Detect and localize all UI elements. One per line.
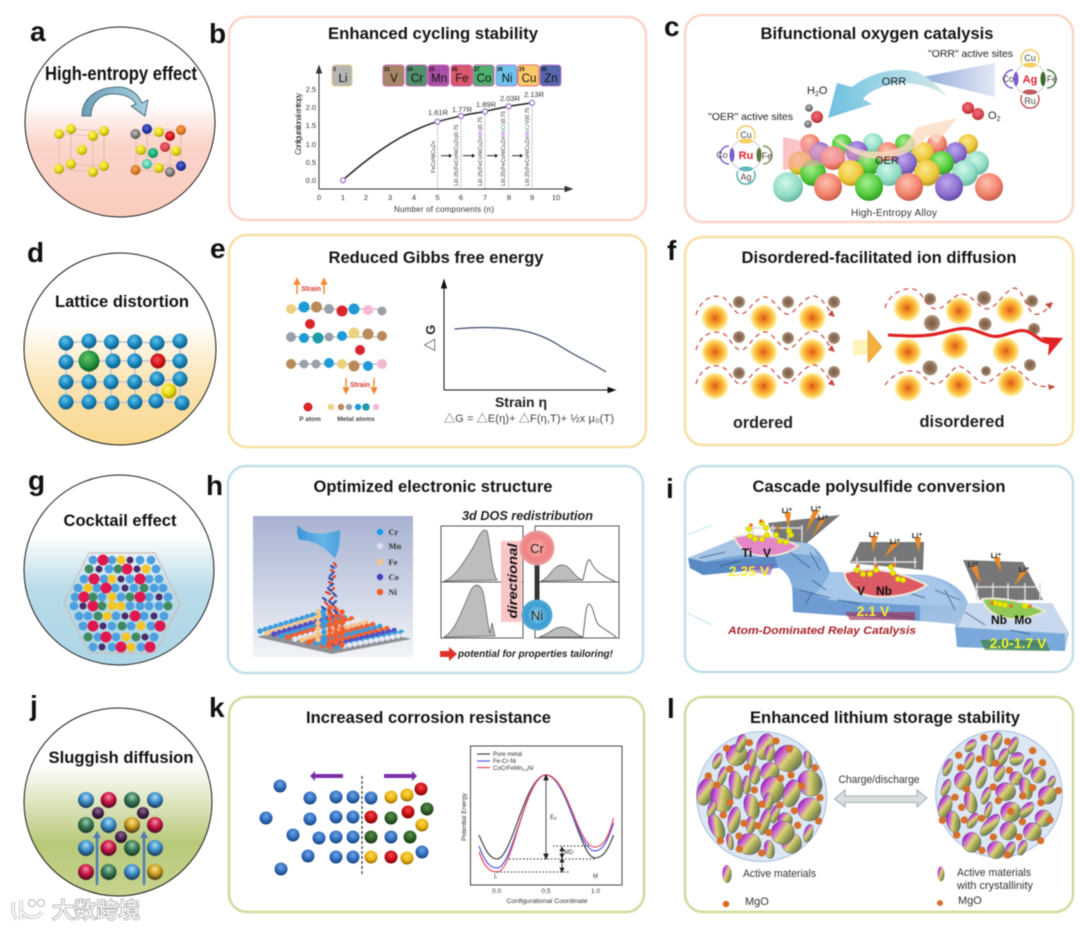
atom pair labels: V — [857, 584, 865, 598]
label a: a — [30, 16, 46, 47]
line chart: configurational entropy: Number of components (n) — [394, 205, 494, 214]
potential energy chart: Configurational Coordinate — [506, 898, 588, 905]
DOS redistribution diagram: 3d DOS redistribution — [462, 508, 593, 523]
heading: Increased corrosion resistance — [306, 708, 551, 727]
label j: j — [29, 690, 38, 721]
atom deposition illustration: Ni — [388, 587, 398, 597]
periodic-table element tiles: 23 — [384, 67, 390, 73]
potential energy chart — [461, 746, 622, 905]
strain label top: Strain — [301, 286, 321, 293]
line chart: configurational entropy: Li0.25(FeCoNiCuZnMn)0.75 — [478, 117, 484, 186]
periodic-table element tiles: Cr — [411, 73, 423, 85]
label l: l — [667, 693, 675, 724]
Li plus ions: Li⁺ — [968, 560, 978, 569]
legend right — [937, 866, 1033, 907]
legend right: Active materials — [957, 867, 1031, 879]
atom deposition illustration: Co — [388, 572, 399, 582]
water molecule — [804, 104, 823, 128]
periodic-table element tiles: Cu — [522, 73, 536, 85]
potential energy chart: 0.0 — [492, 888, 501, 895]
Li plus ions: Li⁺ — [1019, 565, 1029, 574]
sphere alloy surface — [773, 133, 1003, 202]
panel g: cocktail effect — [24, 465, 214, 665]
panel f: disordered-facilitated ion diffusion — [667, 235, 1073, 445]
relay catalysis caption: Atom-Dominated Relay Catalysis — [727, 625, 916, 637]
atom deposition illustration: Fe — [388, 557, 398, 567]
line chart: configurational entropy: 1.5 — [306, 121, 316, 130]
voltage labels — [729, 563, 1047, 651]
atom deposition illustration: Mn — [388, 541, 402, 551]
line chart: configurational entropy: 1.61R — [428, 108, 449, 117]
O2 label: O — [988, 110, 997, 122]
potential energy chart: L — [494, 874, 498, 880]
DOS redistribution diagram: potential for properties tailoring! — [457, 649, 614, 660]
periodic-table element tiles: Li — [339, 73, 347, 85]
ordered label: ordered — [733, 414, 793, 432]
O2 label: 2 — [997, 116, 1001, 123]
ORR site cluster: Co — [1002, 74, 1014, 84]
periodic-table element tiles: 26 — [452, 67, 458, 73]
periodic-table element tiles: Mn — [431, 73, 447, 85]
Gibbs free energy chart: Strain η — [495, 394, 547, 410]
ordered crystal cell — [54, 124, 109, 177]
Li plus ions: Li⁺ — [811, 504, 821, 513]
label b: b — [209, 18, 226, 49]
catalyst boats — [734, 519, 1045, 619]
ORR curved arrow — [828, 70, 947, 118]
panel k: increased corrosion resistance — [209, 692, 644, 912]
heading: Reduced Gibbs free energy — [328, 248, 544, 267]
line chart: configurational entropy: 0.5 — [306, 158, 316, 167]
disordered crystal cell — [130, 124, 186, 177]
diffusion atoms — [78, 792, 163, 880]
periodic-table element tiles: Zn — [544, 73, 558, 85]
legend atoms: P atom — [299, 416, 321, 423]
watermark — [13, 898, 140, 923]
label e: e — [210, 233, 226, 264]
OER site cluster — [716, 126, 772, 184]
legend atoms — [299, 402, 379, 423]
atom pair labels: V — [763, 546, 771, 560]
potential energy chart: Pure metal — [493, 752, 522, 758]
heading: Bifunctional oxygen catalysis — [760, 24, 994, 43]
ORR site cluster: Fe — [1047, 74, 1057, 84]
grey membranes and fences — [744, 515, 1043, 600]
watermark: 大数跨境 — [52, 898, 140, 923]
strain arrows top — [294, 279, 326, 294]
heading: Cocktail effect — [64, 511, 177, 530]
periodic-table element tiles: 27 — [474, 67, 480, 73]
label k: k — [209, 692, 225, 723]
periodic-table element tiles: 25 — [429, 67, 435, 73]
line chart: configurational entropy: 10 — [552, 193, 560, 202]
Li plus ions: Li⁺ — [782, 506, 792, 515]
heading: Lattice distortion — [55, 292, 189, 311]
periodic-table element tiles: Fe — [455, 73, 469, 85]
H2O label: O — [819, 85, 828, 97]
heading: Sluggish diffusion — [48, 748, 194, 767]
potential energy chart: M — [593, 874, 598, 880]
periodic-table element tiles: Ni — [502, 73, 512, 85]
ORR site cluster: Ru — [1024, 96, 1036, 106]
line chart: configurational entropy: 2 — [364, 193, 368, 202]
legend right: MgO — [958, 895, 982, 907]
periodic-table element tiles: Co — [477, 73, 491, 85]
line chart: configurational entropy: 1.89R — [476, 100, 497, 109]
upward blue arrows — [93, 831, 148, 885]
panel l: enhanced lithium storage stability — [667, 693, 1073, 912]
ORR label: ORR — [882, 76, 906, 88]
atom pair labels — [742, 546, 1032, 627]
line chart: configurational entropy: 5 — [435, 193, 440, 202]
legend left — [722, 865, 816, 908]
atom pair labels: Ti — [742, 546, 752, 560]
line chart: configurational entropy: Configurational entropy — [294, 93, 303, 155]
line chart: configurational entropy — [294, 66, 572, 214]
Li plus ions: Li⁺ — [991, 551, 1001, 560]
line chart: configurational entropy: Li0.25(FeCoNiCuZnMnCrV)0.75 — [525, 107, 531, 186]
legend atoms: Metal atoms — [337, 416, 375, 423]
purple arrows — [310, 771, 417, 781]
panel e: reduced Gibbs free energy — [210, 233, 646, 447]
distorted lattice — [58, 334, 190, 410]
label g: g — [28, 465, 45, 496]
voltage labels: 2.0-1.7 V — [990, 635, 1047, 651]
strain arrows bottom — [344, 378, 376, 393]
ordered lattice — [696, 296, 840, 400]
line chart: configurational entropy: 1.77R — [452, 105, 473, 114]
heading: Enhanced lithium storage stability — [750, 708, 1021, 727]
periodic-table element tiles: 29 — [519, 67, 525, 73]
label h: h — [206, 470, 223, 501]
Li plus ions: Li⁺ — [818, 513, 828, 522]
periodic-table element tiles: V — [390, 73, 398, 85]
potential energy chart: 0.5 — [522, 767, 529, 772]
panel a: high-entropy effect — [25, 16, 215, 217]
strain label bottom: Strain — [350, 382, 370, 389]
potential energy chart: 0.5 — [541, 888, 551, 895]
DOS redistribution diagram — [440, 508, 619, 661]
ORR site cluster: Ag — [1023, 74, 1037, 86]
label c: c — [664, 11, 680, 42]
ion diffusion path arrow — [888, 328, 1063, 356]
OER site cluster: Co — [716, 150, 728, 160]
label d: d — [27, 237, 44, 268]
potential energy chart: Ni — [528, 766, 534, 772]
oxygen molecule — [962, 102, 984, 120]
potential energy chart: Fe-Cr-Ni — [493, 759, 516, 765]
periodic-table element tiles: 30 — [541, 67, 547, 73]
potential energy chart: Eₐ — [550, 815, 557, 821]
line chart: configurational entropy: Li0.25(FeCoNiCuZnMnCr)0.75 — [501, 111, 507, 186]
potential energy chart: CoCrFeMn — [493, 766, 522, 772]
periodic-table element tiles: 24 — [407, 67, 413, 73]
charge/discharge label: Charge/discharge — [838, 774, 920, 786]
legend left: MgO — [745, 896, 769, 908]
OER site cluster: Fe — [762, 151, 772, 161]
periodic-table element tiles — [332, 65, 561, 86]
heading: Optimized electronic structure — [314, 477, 552, 496]
disordered label: disordered — [920, 413, 1004, 431]
line chart: configurational entropy: 0 — [317, 193, 321, 202]
line chart: configurational entropy: 1.0 — [306, 140, 316, 149]
Li plus ions: Li⁺ — [890, 537, 900, 546]
line chart: configurational entropy: 2.13R — [524, 90, 545, 99]
hexagon dot alloy — [64, 553, 180, 653]
heading: Enhanced cycling stability — [328, 24, 539, 43]
legend right: with crystallinity — [956, 880, 1033, 892]
H2O label: 2 — [815, 91, 819, 98]
H2O label: H — [807, 85, 815, 97]
double arrow — [834, 790, 927, 807]
label i: i — [666, 473, 674, 504]
panel i: cascade polysulfide conversion — [666, 466, 1073, 672]
Gibbs free energy chart: △ G — [423, 325, 438, 351]
DOS redistribution diagram: Cr — [530, 541, 545, 556]
legend left: Active materials — [743, 868, 816, 880]
atom pair labels: Nb — [876, 584, 892, 598]
potential energy chart: Potential Energy — [461, 792, 468, 841]
ORR site cluster: Cu — [1024, 53, 1036, 63]
icon: curved arrow — [82, 87, 148, 116]
OER site cluster: Cu — [740, 130, 752, 140]
atom deposition illustration — [253, 516, 413, 657]
panel d: lattice distortion — [24, 237, 216, 445]
periodic-table element tiles: 3 — [333, 67, 336, 73]
OER site cluster: Ag — [740, 172, 752, 182]
DOS redistribution diagram: Ni — [531, 608, 543, 623]
line chart: configurational entropy: 3 — [388, 193, 392, 202]
DOS redistribution diagram: directional — [505, 543, 520, 618]
voltage labels: 2.1 V — [857, 603, 890, 619]
left particle composite — [694, 732, 827, 862]
line chart: configurational entropy: 2.0 — [306, 103, 316, 112]
OER site cluster: Ru — [739, 150, 753, 162]
heading: Cascade polysulfide conversion — [752, 477, 1006, 496]
Li plus ions — [782, 504, 1029, 586]
Li plus ions: Li⁺ — [869, 530, 879, 539]
ORR active sites label: "ORR" active sites — [928, 48, 1013, 60]
transition arrow — [853, 330, 882, 363]
OER active sites label: "OER" active sites — [708, 111, 793, 123]
Li plus ions: Li⁺ — [912, 531, 922, 540]
line chart: configurational entropy: 2.5 — [306, 85, 316, 94]
OER label: OER — [875, 155, 899, 167]
line chart: configurational entropy: 9 — [530, 193, 534, 202]
atom pair labels: Mo — [1014, 613, 1032, 627]
disordered lattice — [885, 288, 1055, 402]
Gibbs free energy chart — [423, 280, 615, 425]
line chart: configurational entropy: 1 — [341, 193, 345, 202]
Gibbs free energy chart: △G = △E(η)+ △F(η,T)+ ½x μ₀(T) — [444, 412, 614, 425]
line chart: configurational entropy: 6 — [459, 193, 463, 202]
line chart: configurational entropy: Li0.25(FeCoNiCuZn)0.75 — [454, 125, 460, 186]
line chart: configurational entropy: 0.0 — [306, 176, 316, 185]
panel b: enhanced cycling stability — [209, 17, 646, 220]
atom chains under strain — [286, 302, 387, 372]
panel h: optimized electronic structure — [206, 466, 643, 673]
label f: f — [667, 235, 677, 266]
water cascade — [687, 525, 1069, 651]
ORR site cluster — [1002, 50, 1057, 108]
line chart: configurational entropy: 4 — [412, 193, 416, 202]
potential energy chart: MD — [564, 850, 574, 856]
OER wedge and arrow — [783, 118, 957, 170]
heading: high-entropy effect: High-entropy effect — [45, 64, 198, 85]
atom pair labels: Nb — [991, 613, 1007, 627]
line chart: configurational entropy: 8 — [507, 193, 511, 202]
line chart: configurational entropy: FeCoNiCuZn — [431, 141, 437, 173]
potential energy chart: 1.0 — [591, 888, 600, 895]
line chart: configurational entropy: 2.03R — [500, 94, 521, 103]
voltage labels: 2.35 V — [729, 563, 770, 579]
line chart: configurational entropy: 7 — [483, 193, 487, 202]
ORR wedge — [917, 63, 995, 97]
heading: Disordered-facilitated ion diffusion — [742, 248, 1016, 267]
alloy caption: High-Entropy Alloy — [851, 208, 937, 219]
right particle composite — [936, 731, 1062, 860]
diffusing atoms — [260, 776, 434, 876]
panel j: sluggish diffusion — [24, 690, 212, 896]
panel c: bifunctional oxygen catalysis — [664, 11, 1073, 222]
atom deposition illustration: Cr — [388, 527, 399, 537]
periodic-table element tiles: 28 — [497, 67, 503, 73]
